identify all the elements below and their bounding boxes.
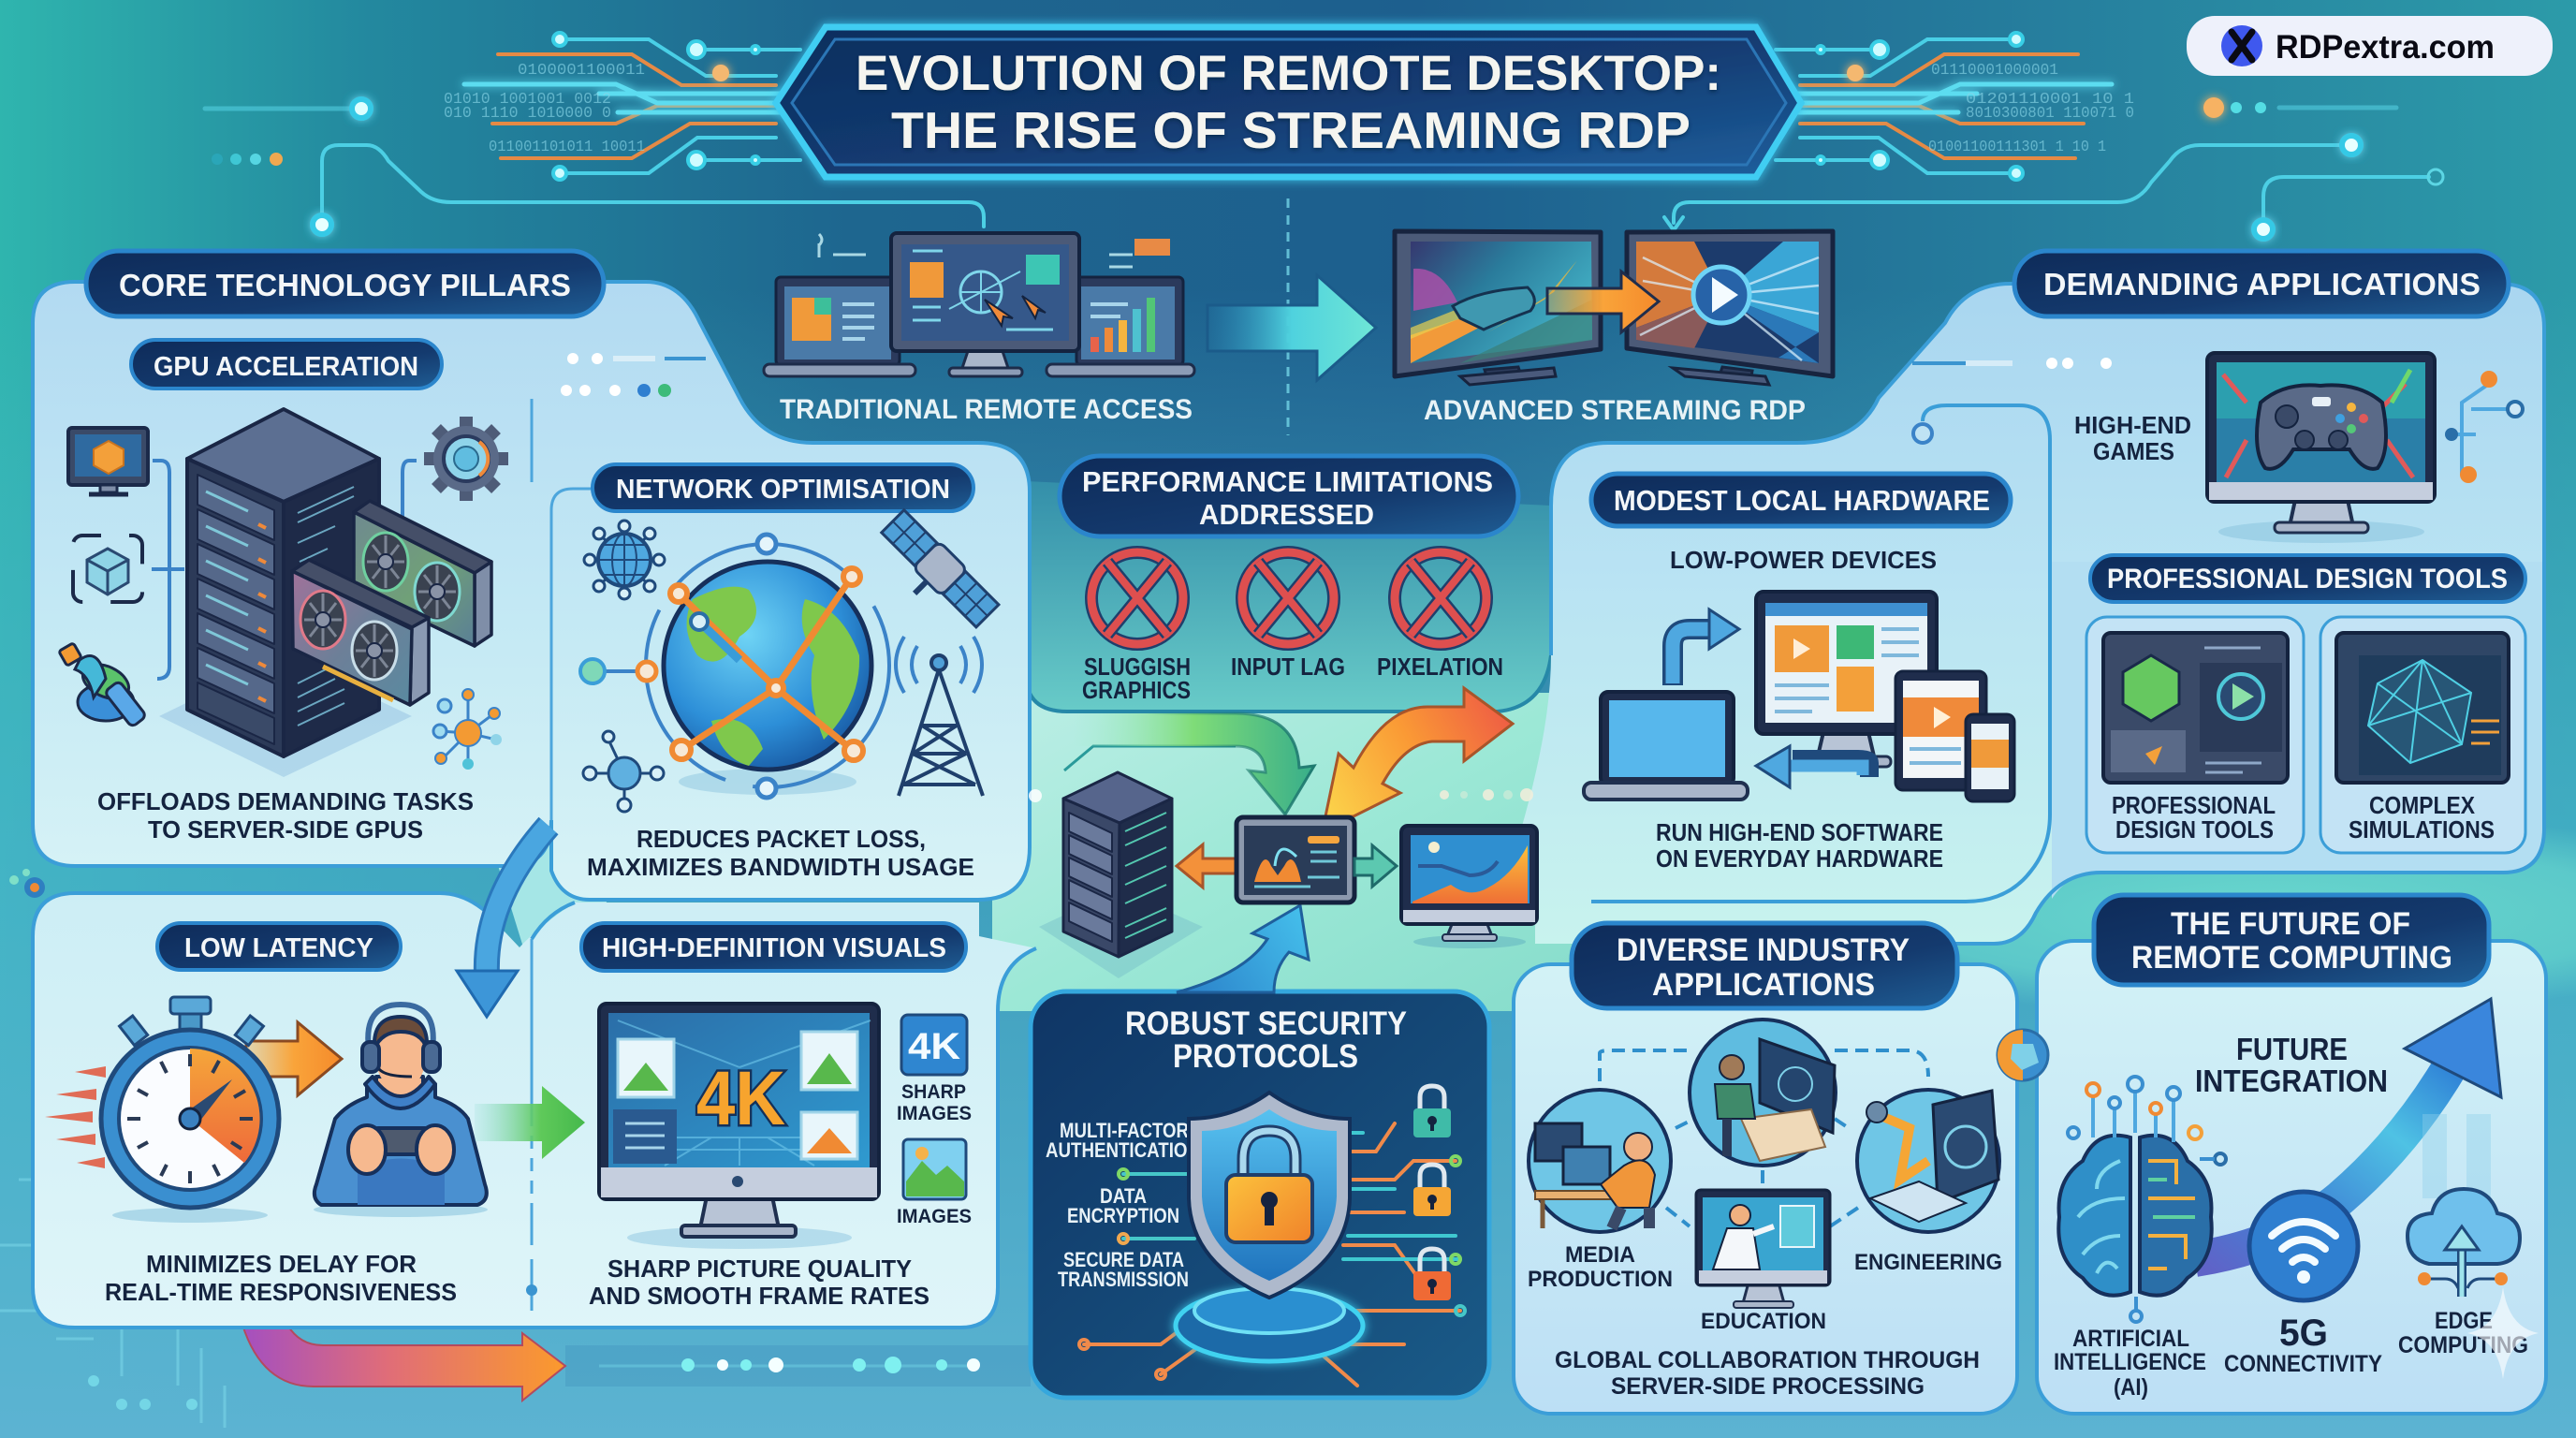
left title circuitry xyxy=(205,33,984,234)
heading: network optimisation xyxy=(593,464,973,511)
low-power devices label: LOW-POWER DEVICES xyxy=(1670,546,1937,574)
binary streams: 010 1110 1010000 0 xyxy=(444,105,611,123)
industry labels: EDUCATION xyxy=(1701,1309,1826,1334)
advanced streaming RDP illustration xyxy=(1395,231,1833,385)
arrow: future growth xyxy=(2195,999,2501,1259)
icon: stopwatch xyxy=(45,997,279,1223)
title text: THE RISE OF STREAMING RDP xyxy=(891,101,1690,159)
icon: circuit nodes xyxy=(2445,371,2523,483)
heading: low latency xyxy=(157,923,401,970)
sharp images label: SHARP xyxy=(901,1081,966,1103)
icon: hub monitor xyxy=(1237,817,1354,902)
icon: 5G wifi xyxy=(2249,1192,2358,1300)
icon: gear xyxy=(424,417,508,501)
binary streams: 01010 1001001 0012 xyxy=(444,91,611,109)
limitation labels xyxy=(1082,653,1503,704)
future technology labels: EDGE xyxy=(2435,1308,2493,1334)
icon: engineering xyxy=(1857,1090,1999,1232)
heading: modest local hardware xyxy=(1591,474,2011,526)
sharp images label xyxy=(897,1081,972,1124)
heading: robust security protocols: PROTOCOLS xyxy=(1173,1038,1358,1075)
icon: AI brain xyxy=(2058,1077,2226,1322)
security feature labels: SECURE DATA xyxy=(1063,1248,1184,1271)
heading: modest local hardware: MODEST LOCAL HARDWARE xyxy=(1614,484,1990,517)
heading: low latency: LOW LATENCY xyxy=(184,933,373,963)
icon: education research xyxy=(1690,1020,1836,1166)
security feature labels: ENCRYPTION xyxy=(1067,1204,1179,1227)
future technology labels: CONNECTIVITY xyxy=(2224,1351,2382,1377)
icon: globe with routes xyxy=(580,535,889,798)
security feature labels xyxy=(1046,1119,1200,1291)
panel: modest hardware and demanding applications body xyxy=(1498,284,2544,944)
dashed center divider xyxy=(1286,198,1290,435)
binary streams: 01110001000001 xyxy=(1931,62,2058,80)
security feature labels: TRANSMISSION xyxy=(1058,1268,1189,1291)
panel: future of remote computing xyxy=(2037,941,2546,1414)
panel: core technology pillars xyxy=(33,282,1030,900)
advanced streaming RDP label: ADVANCED STREAMING RDP xyxy=(1424,395,1806,426)
heading: GPU acceleration xyxy=(131,340,442,389)
icon: teal lock xyxy=(1413,1086,1451,1137)
icon: hub server xyxy=(1039,772,1203,978)
future technology labels: INTELLIGENCE xyxy=(2054,1349,2206,1375)
watermark sparkle xyxy=(2467,1287,2539,1379)
arrow: blue up from security xyxy=(1177,905,1309,992)
flow dots xyxy=(1029,788,1533,802)
heading: diverse industry applications: APPLICATIONS xyxy=(1652,967,1875,1003)
heading: demanding applications xyxy=(2014,251,2509,316)
heading: robust security protocols xyxy=(1125,1005,1407,1075)
security feature labels: DATA xyxy=(1100,1184,1147,1208)
panel: low latency and high definition xyxy=(33,893,1036,1328)
icon: orange node cluster xyxy=(433,689,502,770)
visuals caption xyxy=(589,1255,929,1310)
icon: pixelation cross xyxy=(1395,552,1486,644)
binary streams xyxy=(444,62,2134,156)
future technology labels: ARTIFICIAL xyxy=(2072,1326,2189,1352)
icon: media production xyxy=(1529,1090,1671,1232)
card: complex simulations: COMPLEX xyxy=(2369,791,2476,819)
binary streams: 0100001100011 xyxy=(518,62,645,80)
heading: high-definition visuals: HIGH-DEFINITION VISUALS xyxy=(602,933,946,963)
GPU acceleration caption: OFFLOADS DEMANDING TASKS xyxy=(97,787,474,815)
heading: performance limitations addressed: PERFORMANCE LIMITATIONS xyxy=(1082,465,1493,498)
icon: small left badge xyxy=(9,869,45,898)
future technology labels: 5G xyxy=(2279,1313,2328,1354)
future technology labels: COMPUTING xyxy=(2398,1332,2528,1358)
icon: radio tower xyxy=(896,637,983,796)
heading: future of remote computing xyxy=(2094,895,2489,985)
icon: satellite xyxy=(868,508,1001,641)
icon: junction badge xyxy=(1998,1030,2048,1080)
future integration label: INTEGRATION xyxy=(2195,1064,2388,1098)
icon: 4K badge: 4K xyxy=(908,1026,960,1067)
icon: input lag cross xyxy=(1242,552,1334,644)
icon: server tower xyxy=(159,409,412,777)
high-end games label: HIGH-END xyxy=(2074,411,2191,439)
modest hardware caption xyxy=(1656,818,1943,873)
dashed connectors xyxy=(1600,1050,1928,1226)
future integration label xyxy=(2195,1032,2388,1098)
icon: 4K badge xyxy=(901,1015,967,1075)
arrow: hub to server xyxy=(1177,844,1237,888)
heading: performance limitations addressed: ADDRESSED xyxy=(1199,498,1374,531)
industry labels: PRODUCTION xyxy=(1528,1267,1673,1292)
heading: performance limitations addressed xyxy=(1060,456,1518,536)
heading: diverse industry applications: DIVERSE INDUSTRY xyxy=(1617,932,1910,968)
limitation labels: SLUGGISH xyxy=(1084,653,1191,681)
diverse applications caption xyxy=(1555,1347,1980,1400)
card: complex simulations xyxy=(2320,617,2525,853)
future integration label: FUTURE xyxy=(2236,1032,2348,1066)
icon: GPU card back xyxy=(354,501,491,646)
logo pill: RDPextra.com xyxy=(2276,29,2495,66)
network caption xyxy=(587,825,974,881)
logo pill xyxy=(2187,16,2553,76)
security circuit lines xyxy=(1079,1123,1465,1386)
icon: orange lock xyxy=(1413,1165,1451,1216)
bottom flow arrow and dots xyxy=(242,1325,1031,1401)
arrow: green curved into hub xyxy=(1064,713,1314,814)
icon: red lock xyxy=(1413,1249,1451,1300)
industry labels: ENGINEERING xyxy=(1854,1250,2002,1275)
sharp images label: IMAGES xyxy=(897,1103,972,1124)
low latency caption xyxy=(105,1250,457,1306)
limitation labels: PIXELATION xyxy=(1377,653,1503,681)
logo icon xyxy=(2221,25,2262,66)
traditional remote access label: TRADITIONAL REMOTE ACCESS xyxy=(780,394,1193,425)
card: professional design tools: DESIGN TOOLS xyxy=(2115,815,2274,844)
binary streams: 01001100111301 1 10 1 xyxy=(1928,139,2106,156)
industry labels: MEDIA xyxy=(1565,1242,1635,1268)
card: professional design tools xyxy=(2086,617,2304,853)
high-end games label: GAMES xyxy=(2093,437,2174,465)
icon: landscape image xyxy=(903,1139,966,1199)
heading: robust security protocols: ROBUST SECURITY xyxy=(1125,1005,1407,1042)
heading: future of remote computing: THE FUTURE OF xyxy=(2171,906,2410,942)
icon connectors xyxy=(152,461,417,679)
heading: future of remote computing: REMOTE COMPUTING xyxy=(2131,940,2452,976)
arrow: hub to display xyxy=(1354,845,1397,887)
icon: molecule nodes xyxy=(583,731,664,812)
icon: display with chart xyxy=(1401,826,1537,948)
card: complex simulations: SIMULATIONS xyxy=(2349,815,2495,844)
industry labels xyxy=(1528,1242,2002,1334)
heading: GPU acceleration: GPU ACCELERATION xyxy=(154,352,418,382)
modest hardware caption: RUN HIGH-END SOFTWARE xyxy=(1656,818,1943,846)
binary streams: 01201110001 10 1 xyxy=(1966,91,2134,109)
modest hardware caption: ON EVERYDAY HARDWARE xyxy=(1656,844,1943,873)
arrow: user to visuals xyxy=(475,1086,585,1159)
performance backdrop xyxy=(1026,481,1551,712)
images label: IMAGES xyxy=(897,1206,972,1227)
low latency caption: REAL-TIME RESPONSIVENESS xyxy=(105,1278,457,1306)
heading: diverse industry applications xyxy=(1572,923,1957,1008)
icon: devices group xyxy=(1584,592,2014,801)
high-end games label xyxy=(2074,411,2191,465)
heading: core technology pillars: CORE TECHNOLOGY PILLARS xyxy=(119,268,571,302)
visuals caption: AND SMOOTH FRAME RATES xyxy=(589,1282,929,1310)
panel: robust security protocols xyxy=(1031,991,1489,1398)
heading: professional design tools: PROFESSIONAL DESIGN TOOLS xyxy=(2107,564,2508,594)
arrow: orange out of hub xyxy=(1325,688,1513,816)
icon: 4K monitor xyxy=(599,1004,879,1249)
title banner xyxy=(776,27,1801,177)
visuals caption: SHARP PICTURE QUALITY xyxy=(607,1255,912,1283)
icon: monitor with cube xyxy=(68,428,148,494)
panel: diverse industry applications xyxy=(1514,964,2017,1414)
icon: gamer with headset xyxy=(314,1005,488,1217)
dots xyxy=(1912,358,2112,369)
icon: education monitor xyxy=(1696,1190,1830,1308)
icon: 3D pen tool xyxy=(59,643,147,727)
binary streams: 8010300801 110071 0 xyxy=(1966,105,2134,123)
network caption: MAXIMIZES BANDWIDTH USAGE xyxy=(587,853,974,881)
icon: edge cloud xyxy=(2408,1114,2520,1297)
card: professional design tools: PROFESSIONAL xyxy=(2112,791,2276,819)
low latency caption: MINIMIZES DELAY FOR xyxy=(146,1250,417,1278)
binary streams: 011001101011 10011 xyxy=(489,139,645,156)
network caption: REDUCES PACKET LOSS, xyxy=(637,825,926,853)
icon: shield with lock xyxy=(1189,1093,1350,1298)
limitation labels: INPUT LAG xyxy=(1231,653,1345,681)
right upper connectors xyxy=(1664,97,2443,239)
heading: core technology pillars xyxy=(86,251,604,316)
future technology labels xyxy=(2054,1308,2528,1401)
title text: EVOLUTION OF REMOTE DESKTOP: xyxy=(856,46,1721,101)
diverse applications caption: GLOBAL COLLABORATION THROUGH xyxy=(1555,1347,1980,1373)
arrow: stopwatch to user xyxy=(246,1022,342,1095)
icon: network globe xyxy=(584,521,665,599)
title text xyxy=(856,46,1721,159)
arrow: pillars to low latency xyxy=(457,826,549,1017)
GPU acceleration caption: TO SERVER-SIDE GPUS xyxy=(148,815,423,844)
icon: game monitor with controller xyxy=(2207,353,2435,543)
icon: glowing portal xyxy=(1176,1288,1363,1361)
icon: GPU card front xyxy=(292,560,429,705)
limitation labels: GRAPHICS xyxy=(1082,676,1191,704)
small dots xyxy=(561,353,706,397)
diverse applications caption: SERVER-SIDE PROCESSING xyxy=(1611,1373,1925,1400)
transition arrow xyxy=(1208,275,1376,380)
security feature labels: MULTI-FACTOR xyxy=(1060,1119,1189,1142)
GPU acceleration caption xyxy=(97,787,474,844)
security feature labels: AUTHENTICATION xyxy=(1046,1138,1200,1162)
heading: network optimisation: NETWORK OPTIMISATION xyxy=(616,475,950,505)
heading: demanding applications: DEMANDING APPLICATIONS xyxy=(2043,267,2481,301)
heading: high-definition visuals xyxy=(581,923,966,971)
traditional remote access illustration xyxy=(764,233,1194,376)
right title circuitry xyxy=(1776,33,2112,180)
future technology labels: (AI) xyxy=(2114,1374,2148,1401)
icon: 3D cube selection xyxy=(73,536,142,602)
icon: sluggish graphics cross xyxy=(1091,552,1183,644)
heading: professional design tools xyxy=(2090,555,2525,602)
icon: 4K monitor: 4K xyxy=(696,1056,785,1141)
